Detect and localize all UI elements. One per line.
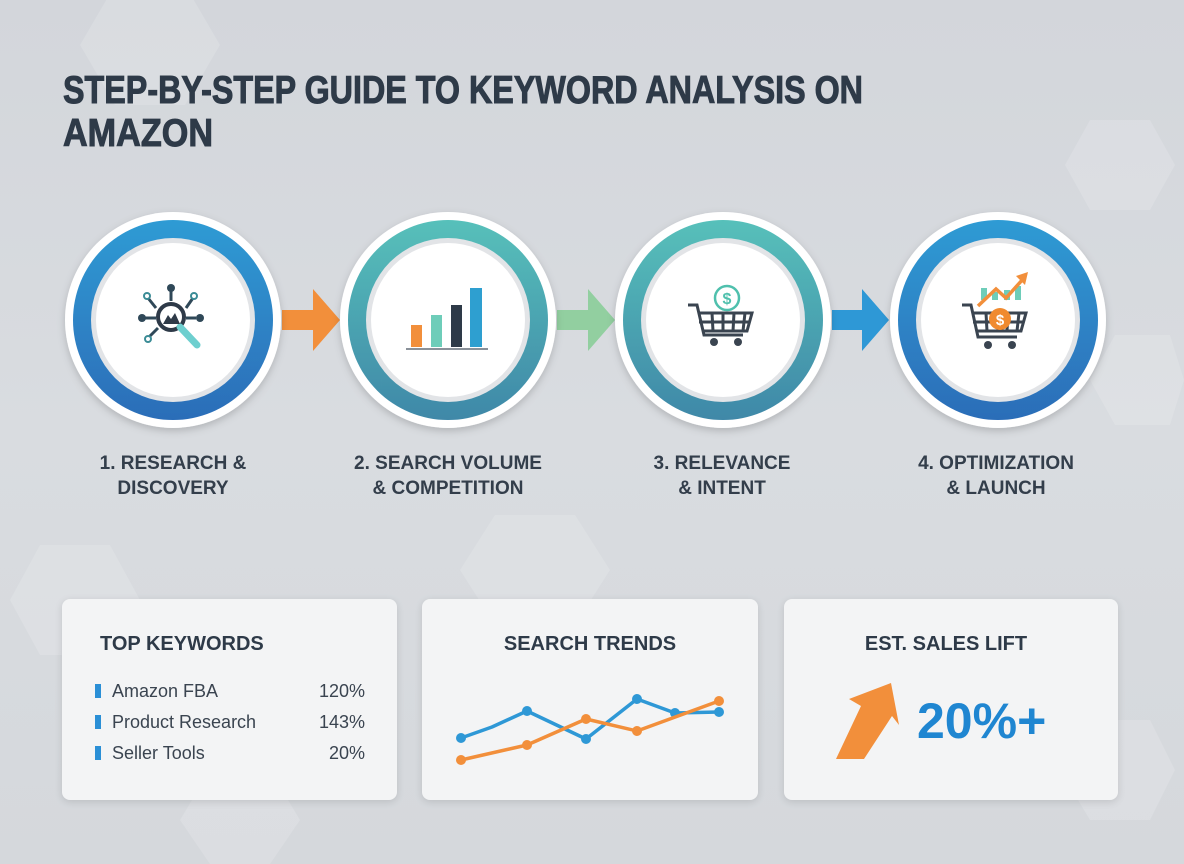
step circle 3 (615, 212, 831, 428)
step circle 2 (340, 212, 556, 428)
icon: orange up arrow (836, 683, 899, 759)
step label 4 (918, 453, 1074, 499)
heading: top keywords: TOP KEYWORDS (100, 633, 264, 655)
title: AMAZON (63, 112, 213, 154)
keyword row 1 (95, 681, 365, 701)
step label 1: 1. RESEARCH & (100, 453, 246, 474)
step label 4: 4. OPTIMIZATION (918, 453, 1074, 474)
icon: cart with growth chart (981, 286, 1021, 300)
line chart (456, 694, 724, 765)
heading: est. sales lift: EST. SALES LIFT (865, 633, 1027, 655)
step circle 1 (65, 212, 281, 428)
panel: search trends (422, 599, 758, 800)
step label 3: & INTENT (678, 478, 766, 499)
process circles: $ (996, 312, 1005, 329)
big stat: 20%+ (917, 693, 1046, 749)
keyword row 1: Amazon FBA (112, 681, 218, 701)
step label 2: & COMPETITION (373, 478, 523, 499)
arrow: 3 to 4 (832, 289, 889, 351)
keyword row 2: 143% (319, 712, 365, 732)
step label 3: 3. RELEVANCE (654, 453, 790, 474)
keyword row 3: 20% (329, 743, 365, 763)
keyword row 3 (95, 743, 365, 763)
process circles: $ (723, 291, 732, 308)
title (63, 69, 863, 154)
heading: search trends: SEARCH TRENDS (504, 633, 676, 655)
icon: magnifier network (145, 291, 197, 345)
step label 2 (354, 453, 542, 499)
step circle 4 (890, 212, 1106, 428)
panel: est. sales lift (784, 599, 1118, 800)
step label 1 (100, 453, 246, 499)
keyword row 3: Seller Tools (112, 743, 205, 763)
icon: cart with dollar (688, 286, 752, 335)
keyword row 2 (95, 712, 365, 732)
panel: top keywords (62, 599, 397, 800)
step label 2: 2. SEARCH VOLUME (354, 453, 542, 474)
step label 4: & LAUNCH (946, 478, 1046, 499)
process circles (62, 212, 1109, 434)
arrow: 2 to 3 (557, 289, 615, 351)
step label 1: DISCOVERY (117, 478, 229, 499)
icon: bar chart (406, 288, 488, 350)
keyword row 1: 120% (319, 681, 365, 701)
arrow: 1 to 2 (282, 289, 340, 351)
keyword row 2: Product Research (112, 712, 256, 732)
step label 3 (654, 453, 790, 499)
